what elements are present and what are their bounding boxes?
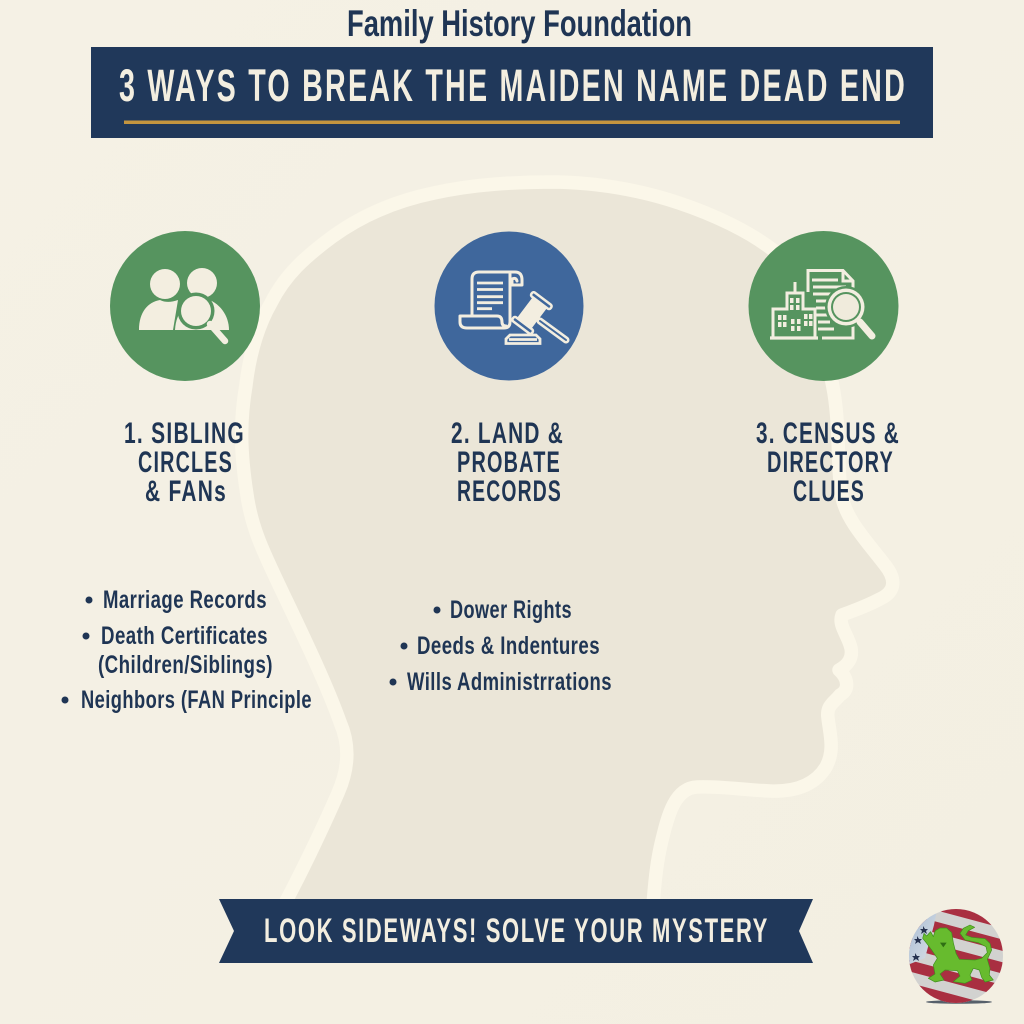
bullet list: sibling circles (62, 586, 312, 714)
bullet list: sibling circles: Neighbors (FAN Principle (81, 686, 312, 714)
heading: sibling circles (124, 417, 245, 508)
heading: land and probate records: RECORDS (457, 475, 562, 508)
ribbon slogan: LOOK SIDEWAYS! SOLVE YOUR MYSTERY (264, 912, 769, 950)
heading: land and probate records: PROBATE (457, 446, 561, 479)
panel: land and probate records (390, 232, 612, 696)
heading: land and probate records (451, 417, 564, 508)
heading: sibling circles: 1. SIBLING (124, 417, 245, 450)
logo: lion on american flag (909, 909, 1003, 1004)
panel: census and directory clues (748, 231, 900, 508)
heading: sibling circles: CIRCLES (138, 446, 233, 479)
bullet list: land and probate records: Wills Administrrations (407, 668, 612, 696)
head outline (242, 182, 893, 905)
bullet list: land and probate records: Dower Rights (450, 596, 572, 624)
icon: people with magnifying glass (110, 231, 260, 381)
heading: sibling circles: & FANs (145, 475, 227, 508)
icon: scroll and gavel (434, 232, 584, 380)
organization name: Family History Foundation (347, 3, 692, 44)
bullet list: sibling circles: (Children/Siblings) (98, 651, 273, 679)
bullet list: sibling circles: Death Certificates (101, 622, 268, 650)
panel: sibling circles (62, 231, 312, 714)
heading: land and probate records: 2. LAND & (451, 417, 564, 450)
bullet list: sibling circles: Marriage Records (103, 586, 267, 614)
bullet list: land and probate records: Deeds & Indentures (417, 632, 600, 660)
heading: census and directory clues: 3. CENSUS & (756, 417, 900, 450)
heading: census and directory clues: CLUES (793, 475, 865, 508)
bottom ribbon (219, 899, 813, 963)
heading: census and directory clues: DIRECTORY (767, 446, 894, 479)
icon: building, document and magnifying glass (748, 231, 898, 381)
title banner (91, 47, 933, 138)
head silhouette (242, 182, 893, 905)
heading: census and directory clues (756, 417, 900, 508)
bullet list: land and probate records (390, 596, 612, 696)
